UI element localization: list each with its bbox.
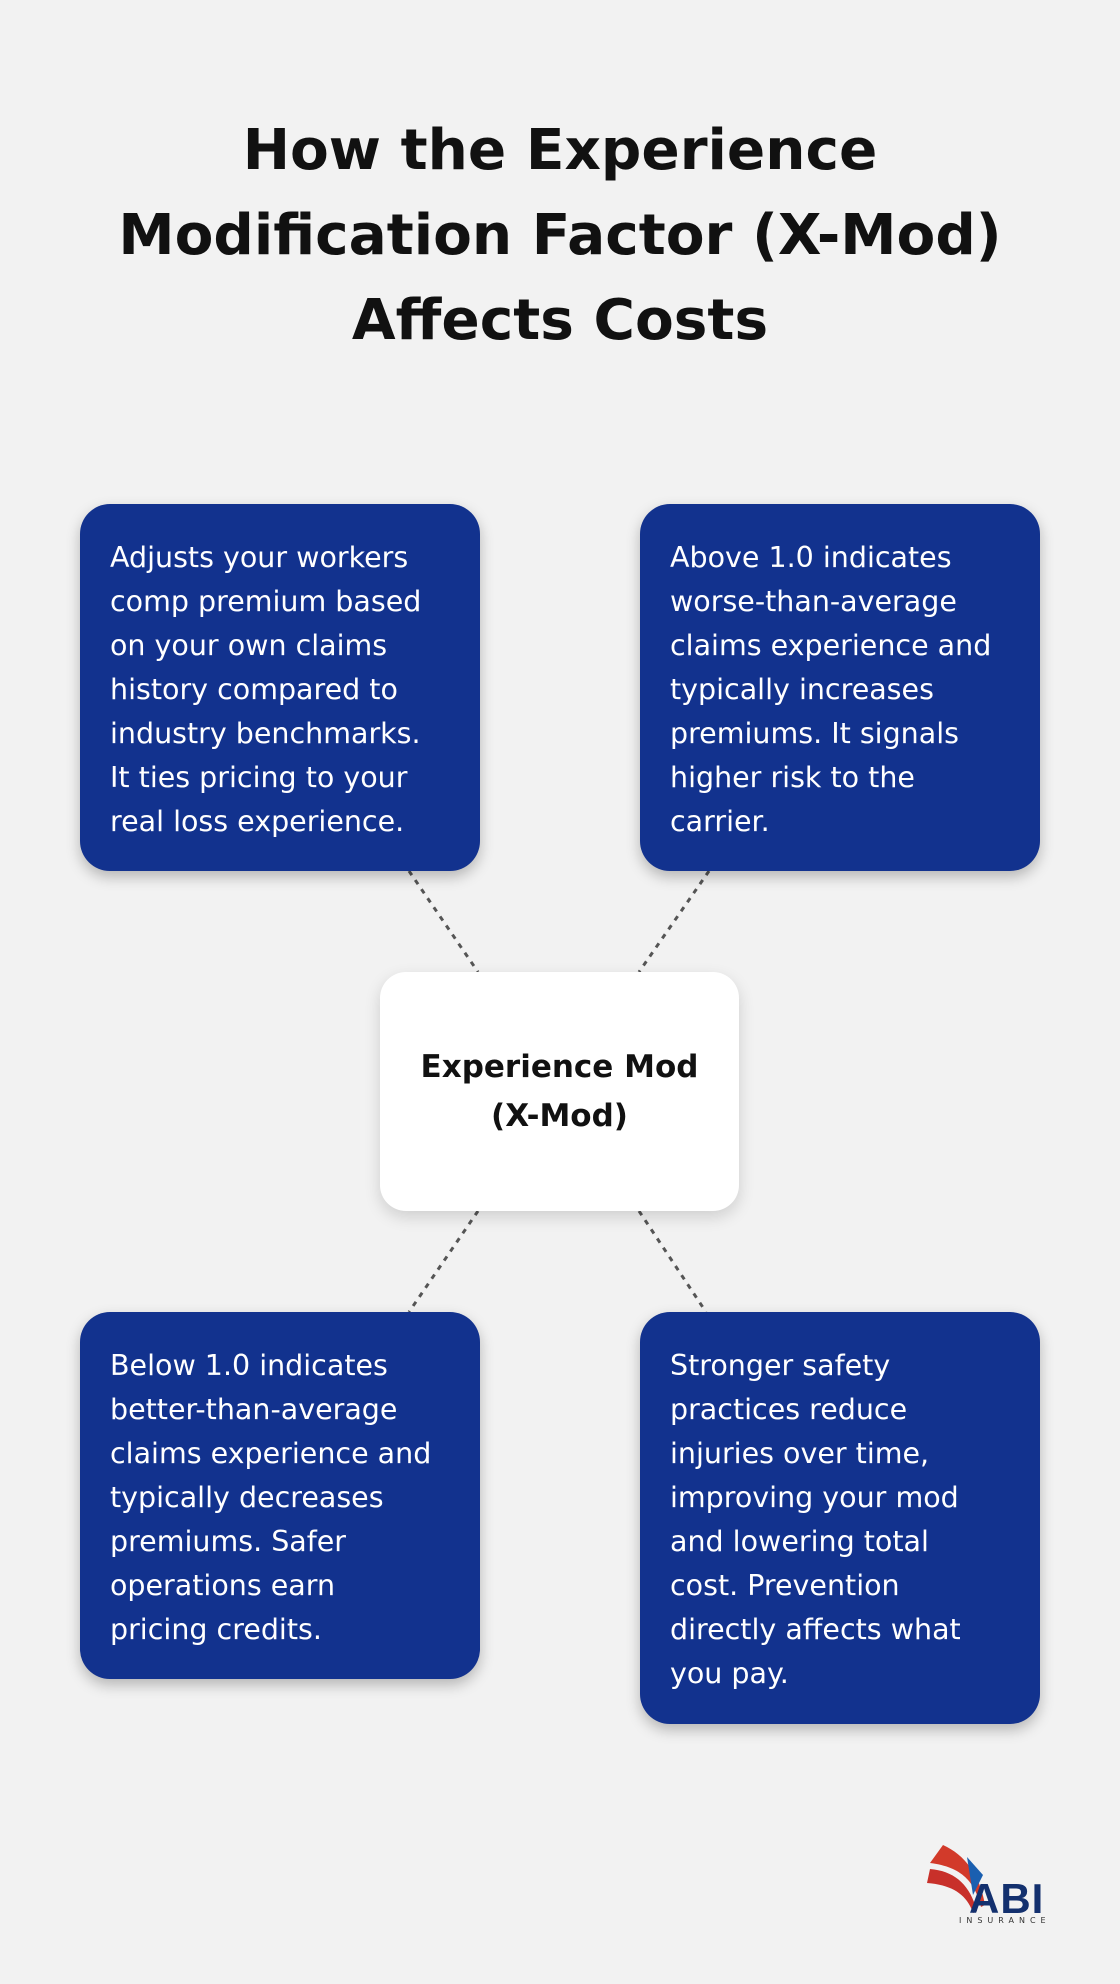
- panel: bottom-left below 1.0: claims experience and: [110, 1437, 431, 1470]
- panel: bottom-left below 1.0: better-than-average: [110, 1393, 397, 1426]
- panel: top-left definition: history compared to: [110, 673, 398, 706]
- panel: top-right above 1.0: Above 1.0 indicates: [670, 541, 952, 574]
- panel: bottom-right safety: directly affects what: [670, 1613, 961, 1646]
- panel: bottom-left below 1.0: [80, 1312, 480, 1679]
- panel: top-left definition: It ties pricing to your: [110, 761, 407, 794]
- center node: (X-Mod): [491, 1098, 628, 1134]
- panel: bottom-right safety: injuries over time,: [670, 1437, 929, 1470]
- panel: top-right above 1.0: [640, 504, 1040, 871]
- panel: top-left definition: industry benchmarks.: [110, 717, 421, 750]
- panel: bottom-left below 1.0: pricing credits.: [110, 1613, 322, 1646]
- panel: top-left definition: comp premium based: [110, 585, 421, 618]
- panel: bottom-left below 1.0: operations earn: [110, 1569, 335, 1602]
- logo: ABI Insurance: INSURANCE: [959, 1916, 1051, 1925]
- panel: bottom-right safety: practices reduce: [670, 1393, 907, 1426]
- panel: top-left definition: real loss experience.: [110, 805, 404, 838]
- panel: bottom-right safety: and lowering total: [670, 1525, 929, 1558]
- panel: top-right above 1.0: premiums. It signals: [670, 717, 959, 750]
- panel: top-right above 1.0: carrier.: [670, 805, 770, 838]
- panel: top-right above 1.0: typically increases: [670, 673, 934, 706]
- panel: top-left definition: [80, 504, 480, 871]
- panel: top-right above 1.0: claims experience and: [670, 629, 991, 662]
- panel: bottom-right safety: cost. Prevention: [670, 1569, 900, 1602]
- panel: bottom-right safety: you pay.: [670, 1657, 789, 1690]
- panel: bottom-left below 1.0: Below 1.0 indicates: [110, 1349, 388, 1382]
- center node: Experience Mod: [421, 1048, 698, 1084]
- center node: [380, 972, 739, 1211]
- panel: top-right above 1.0: higher risk to the: [670, 761, 915, 794]
- panel: top-left definition: on your own claims: [110, 629, 387, 662]
- panel: top-right above 1.0: worse-than-average: [670, 585, 957, 618]
- logo: ABI Insurance: ABI: [969, 1875, 1044, 1922]
- panel: bottom-right safety: Stronger safety: [670, 1349, 890, 1382]
- title: How the Experience: [243, 118, 877, 183]
- title: [118, 118, 1002, 353]
- panel: top-left definition: Adjusts your workers: [110, 541, 408, 574]
- panel: bottom-left below 1.0: premiums. Safer: [110, 1525, 346, 1558]
- panel: bottom-left below 1.0: typically decreases: [110, 1481, 384, 1514]
- panel: bottom-right safety: improving your mod: [670, 1481, 959, 1514]
- logo: ABI Insurance: [927, 1845, 1051, 1925]
- title: Modification Factor (X-Mod): [118, 203, 1002, 268]
- title: Affects Costs: [352, 288, 768, 353]
- panel: bottom-right safety: [640, 1312, 1040, 1724]
